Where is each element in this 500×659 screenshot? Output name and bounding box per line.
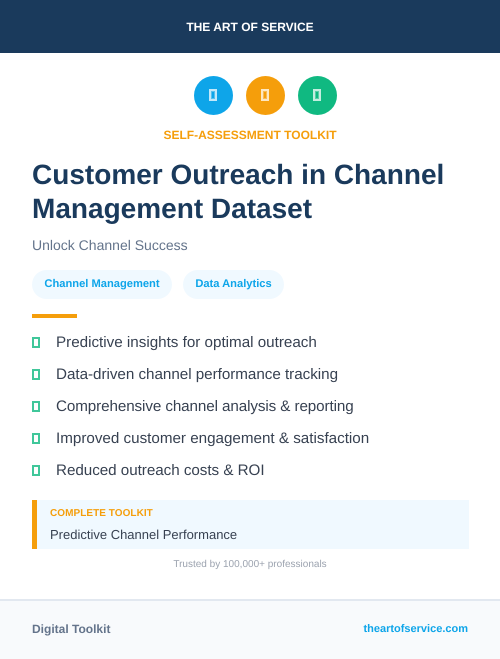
eyebrow label: SELF-ASSESSMENT TOOLKIT xyxy=(163,128,337,142)
check icon 3 xyxy=(32,401,40,412)
subtitle: Unlock Channel Success xyxy=(32,237,188,253)
header bar: THE ART OF SERVICE xyxy=(186,20,314,34)
feature list xyxy=(32,334,369,479)
icon: orange circle xyxy=(246,76,285,115)
feature 3: Comprehensive channel analysis & reporting xyxy=(56,398,354,415)
footer label: Digital Toolkit xyxy=(32,622,110,636)
feature 4: Improved customer engagement & satisfaction xyxy=(56,430,369,447)
icon: green circle xyxy=(298,76,337,115)
callout: complete toolkit xyxy=(32,500,469,549)
feature 2: Data-driven channel performance tracking xyxy=(56,366,338,383)
header bar xyxy=(0,0,500,53)
callout label: COMPLETE TOOLKIT xyxy=(50,508,153,519)
footer xyxy=(0,599,500,659)
icon: blue circle xyxy=(194,76,233,115)
trust note: Trusted by 100,000+ professionals xyxy=(173,559,327,570)
check icon 5 xyxy=(32,465,40,476)
tag: Data Analytics xyxy=(183,270,284,299)
tag: Channel Management xyxy=(32,270,172,299)
callout text: Predictive Channel Performance xyxy=(50,527,237,542)
title: Customer Outreach in Channel xyxy=(32,159,444,190)
feature 5: Reduced outreach costs & ROI xyxy=(56,462,265,479)
accent rule xyxy=(32,314,77,318)
title: Management Dataset xyxy=(32,193,312,224)
feature 1: Predictive insights for optimal outreach xyxy=(56,334,317,351)
check icon 4 xyxy=(32,433,40,444)
tag: Channel Management: Channel Management xyxy=(44,278,160,290)
footer link: theartofservice.com xyxy=(363,623,468,635)
title xyxy=(32,159,444,224)
check icon 1 xyxy=(32,337,40,348)
icon row xyxy=(194,76,337,115)
check icon 2 xyxy=(32,369,40,380)
tag: Data Analytics: Data Analytics xyxy=(195,278,272,290)
